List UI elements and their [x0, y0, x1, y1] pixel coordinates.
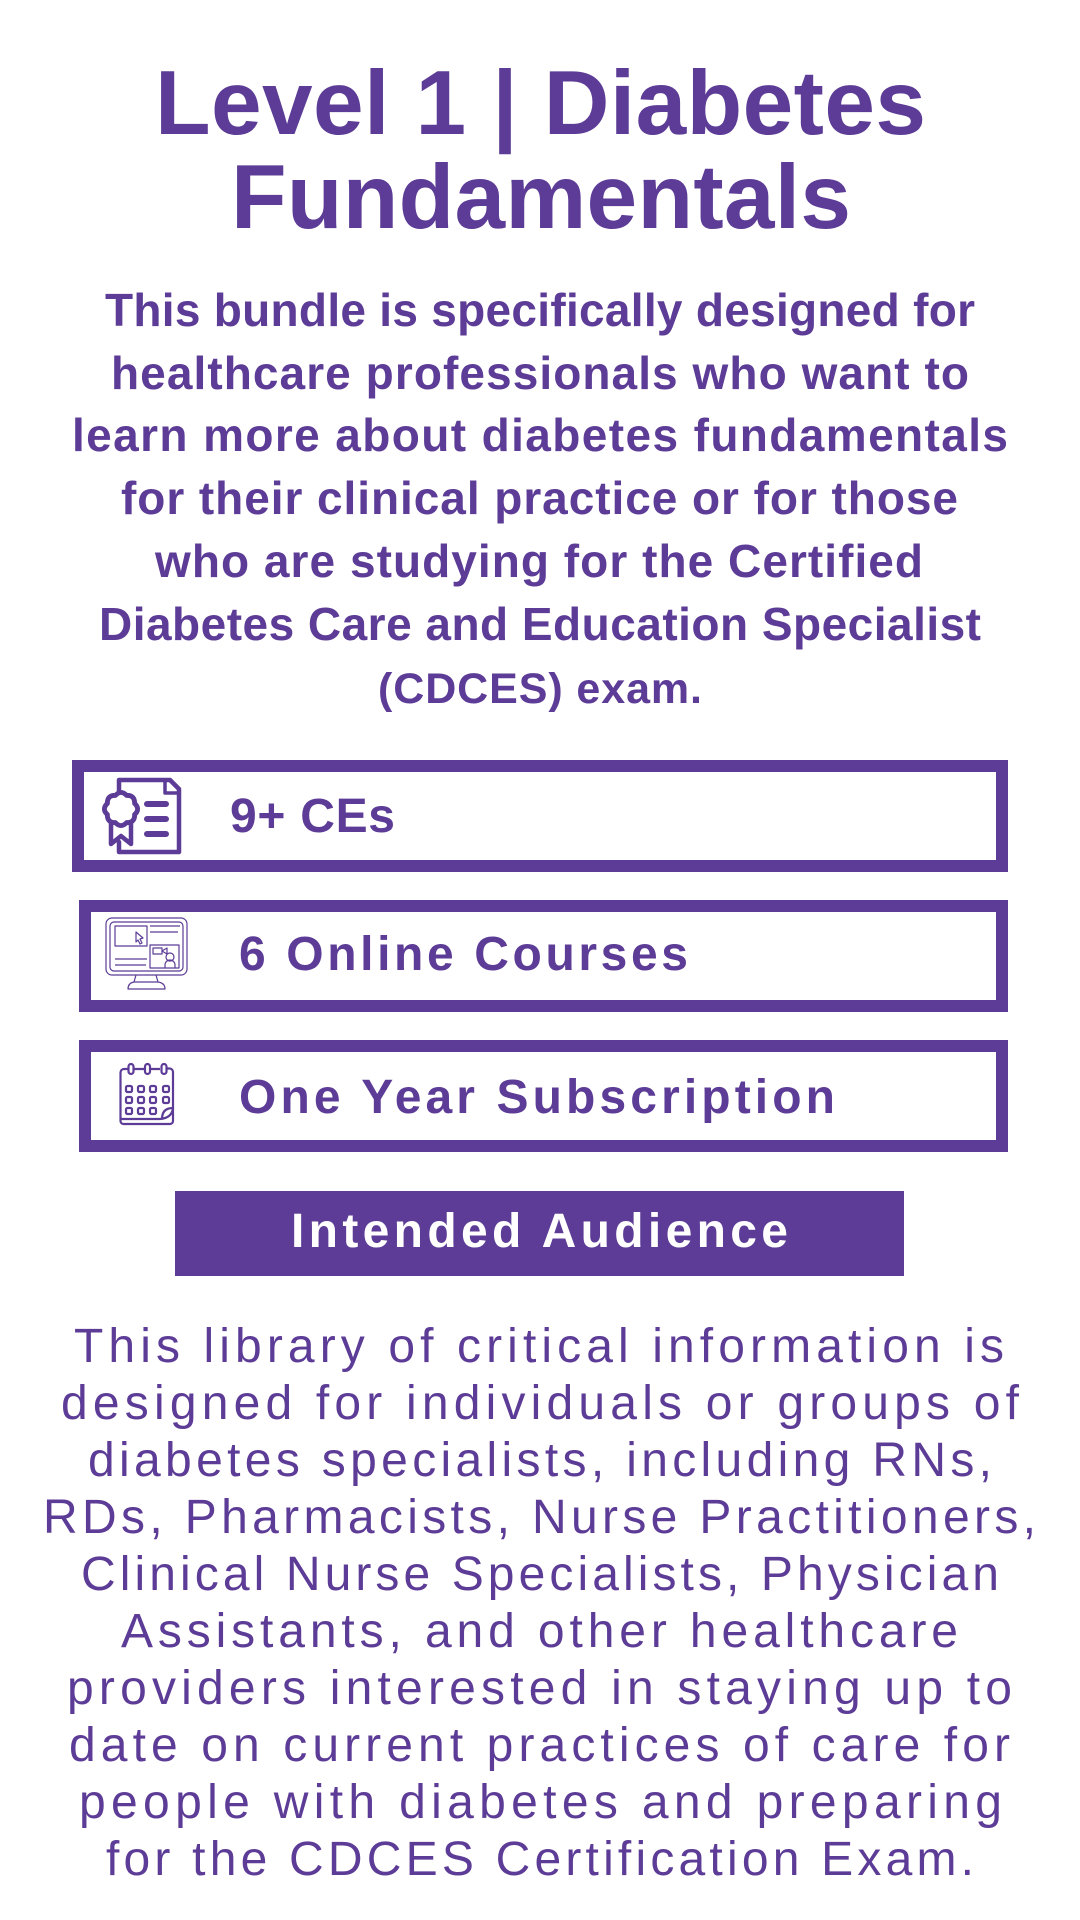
title: Fundamentals: [231, 147, 851, 248]
panel: 9+ CEs: [78, 766, 1002, 866]
icon: calendar: [120, 1064, 173, 1124]
audience text block: diabetes specialists, including RNs,: [88, 1434, 992, 1487]
audience text block: people with diabetes and preparing: [79, 1776, 1002, 1829]
audience text block: date on current practices of care for: [69, 1719, 1010, 1772]
panel: 6 Online Courses: 6 Online Courses: [239, 928, 688, 981]
panel: One Year Subscription: One Year Subscription: [239, 1071, 835, 1124]
banner: Intended Audience: Intended Audience: [291, 1205, 788, 1258]
audience text block: designed for individuals or groups of: [61, 1377, 1020, 1430]
icon: certificate document: [104, 780, 179, 852]
title: Level 1 | Diabetes: [155, 53, 926, 155]
intro text block: who are studying for the Certified: [154, 535, 923, 587]
title: [155, 53, 926, 248]
intro text block: This bundle is specifically designed for: [105, 284, 975, 336]
audience text block: Assistants, and other healthcare: [121, 1605, 958, 1658]
intro text block: learn more about diabetes fundamentals: [72, 409, 1008, 461]
intro text block: Diabetes Care and Education Specialist: [99, 598, 981, 650]
audience text block: providers interested in staying up to: [67, 1662, 1012, 1715]
icon: computer monitor: [106, 918, 187, 989]
intro text block: for their clinical practice or for those: [121, 472, 958, 524]
banner: Intended Audience: [175, 1191, 904, 1276]
intro text block: (CDCES) exam.: [378, 665, 702, 713]
audience text block: This library of critical information is: [74, 1320, 1004, 1373]
intro text block: healthcare professionals who want to: [111, 347, 969, 399]
audience text block: for the CDCES Certification Exam.: [106, 1833, 974, 1886]
intro text block: [72, 284, 1008, 713]
panel: One Year Subscription: [85, 1046, 1002, 1146]
audience text block: RDs, Pharmacists, Nurse Practitioners,: [43, 1491, 1036, 1544]
audience text block: Clinical Nurse Specialists, Physician: [81, 1548, 999, 1601]
audience text block: [43, 1320, 1036, 1886]
panel: 6 Online Courses: [85, 906, 1002, 1006]
panel: 9+ CEs: 9+ CEs: [230, 790, 395, 843]
